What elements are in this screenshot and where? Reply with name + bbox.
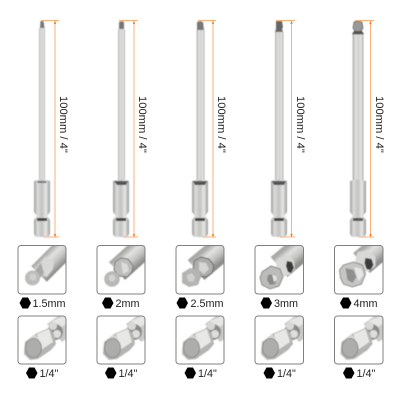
label: 1/4 inch, column 3	[184, 368, 217, 380]
label: 1/4 inch, column 2	[105, 368, 138, 380]
bit 4mm with dimension	[350, 20, 385, 238]
panel: hex shank 3	[176, 316, 226, 364]
label: 1/4 inch, column 1	[26, 368, 59, 380]
bit 2mm with dimension: 100mm / 4"	[136, 96, 148, 153]
bit 2mm with dimension	[113, 20, 148, 238]
bit 3mm with dimension: 100mm / 4"	[294, 96, 306, 153]
label: 1/4 inch, column 4: 1/4"	[277, 368, 296, 380]
label: 1.5mm: 1.5mm	[32, 298, 66, 310]
panel: ball tip 3mm	[254, 245, 304, 294]
panel: ball tip 2.5mm	[176, 245, 224, 294]
label: 3mm	[260, 298, 298, 310]
label: 1.5mm	[20, 298, 66, 310]
panel: ball tip 2mm	[96, 245, 146, 294]
bit 2.5mm with dimension	[192, 20, 227, 238]
label: 4mm: 4mm	[354, 298, 378, 310]
label: 2mm	[102, 298, 140, 310]
bit 1.5mm with dimension: 100mm / 4"	[57, 96, 69, 153]
label: 2.5mm: 2.5mm	[190, 298, 224, 310]
label: 2mm: 2mm	[116, 298, 140, 310]
bit 2.5mm with dimension: 100mm / 4"	[215, 96, 227, 153]
label: 1/4 inch, column 4	[264, 368, 296, 380]
label: 1/4 inch, column 2: 1/4"	[118, 368, 138, 380]
bit 1.5mm with dimension	[34, 20, 69, 238]
label: 1/4 inch, column 3: 1/4"	[198, 368, 217, 380]
label: 3mm: 3mm	[274, 298, 298, 310]
panel: hex shank 2	[97, 316, 147, 364]
label: 2.5mm	[176, 298, 224, 310]
panel: hex shank 1	[18, 316, 68, 364]
panel: hex shank 5	[334, 316, 384, 364]
bit 4mm with dimension: 100mm / 4"	[373, 96, 385, 153]
label: 1/4 inch, column 1: 1/4"	[40, 368, 59, 380]
panel: hex shank 4	[255, 316, 305, 364]
label: 1/4 inch, column 5	[343, 368, 376, 380]
bit 3mm with dimension	[271, 20, 306, 238]
panel: ball tip 4mm	[334, 245, 384, 294]
label: 4mm	[340, 298, 378, 310]
label: 1/4 inch, column 5: 1/4"	[356, 368, 376, 380]
panel: ball tip 1.5mm	[18, 245, 66, 294]
